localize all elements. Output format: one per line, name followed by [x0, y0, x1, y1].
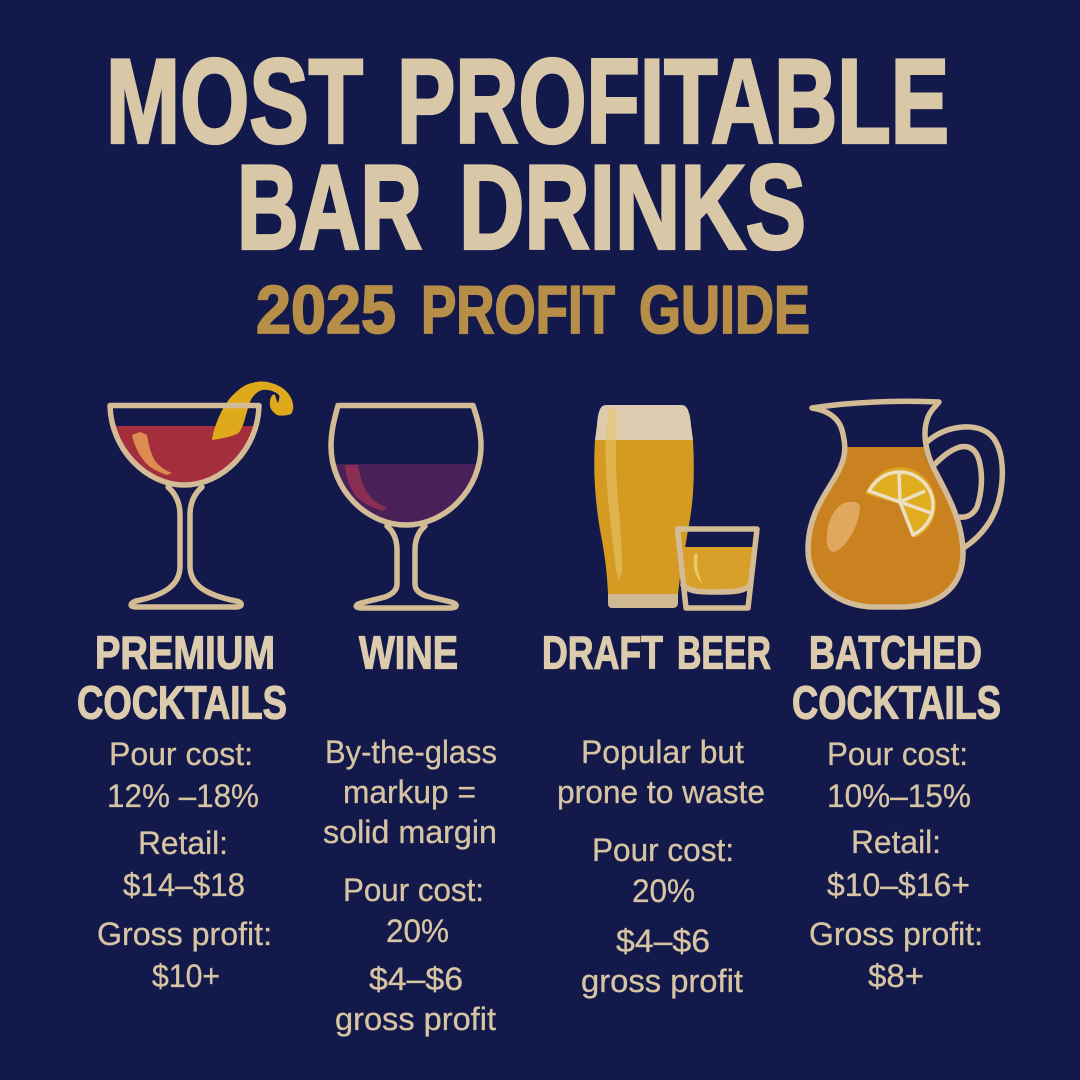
- heading: premium cocktails: PREMIUM: [95, 626, 275, 678]
- heading: draft beer: BEER: [677, 626, 771, 678]
- text: premium cocktails stats: Pour cost:: [109, 736, 253, 772]
- icon: draft beer pint and shot: [594, 405, 757, 608]
- text: wine stats: Pour cost:: [343, 872, 484, 908]
- subtitle: GUIDE: [639, 272, 810, 348]
- text: batched cocktails stats: $8+: [868, 958, 924, 994]
- text: batched cocktails stats: Retail:: [851, 824, 941, 860]
- subtitle: 2025: [256, 272, 396, 348]
- icon: wine glass: [331, 406, 481, 608]
- title: [106, 34, 949, 274]
- text: wine stats: 20%: [386, 913, 449, 949]
- text: premium cocktails stats: 12% –18%: [107, 778, 259, 814]
- heading: premium cocktails: COCKTAILS: [77, 676, 287, 728]
- heading: draft beer: [542, 626, 771, 678]
- text: batched cocktails stats: Gross profit:: [809, 916, 983, 952]
- title: DRINKS: [459, 140, 806, 274]
- subtitle: [256, 272, 810, 348]
- text: premium cocktails stats: Gross profit:: [97, 916, 272, 952]
- icon: premium cocktail coupe: [110, 382, 293, 607]
- text: wine stats: $4–$6: [369, 961, 463, 997]
- text: premium cocktails stats: [97, 736, 272, 994]
- heading: draft beer: DRAFT: [542, 626, 663, 678]
- lemon slice: [865, 467, 936, 538]
- text: draft beer stats: [557, 734, 765, 999]
- text: batched cocktails stats: [809, 736, 983, 994]
- title: BAR: [237, 140, 422, 274]
- text: premium cocktails stats: $14–$18: [123, 867, 245, 903]
- text: wine stats: gross profit: [335, 1001, 496, 1037]
- subtitle: PROFIT: [421, 272, 615, 348]
- text: draft beer stats: gross profit: [581, 963, 743, 999]
- text: batched cocktails stats: $10–$16+: [827, 867, 970, 903]
- text: premium cocktails stats: $10+: [152, 958, 220, 994]
- icon: batched cocktail pitcher: [808, 401, 1002, 607]
- text: batched cocktails stats: 10%–15%: [827, 778, 971, 814]
- panel: draft beer: [542, 626, 771, 999]
- title: MOST: [106, 34, 363, 168]
- panel: premium cocktails: [77, 626, 287, 994]
- text: premium cocktails stats: Retail:: [138, 825, 228, 861]
- text: batched cocktails stats: Pour cost:: [827, 736, 968, 772]
- text: draft beer stats: prone to waste: [557, 774, 765, 810]
- text: wine stats: [323, 734, 497, 1037]
- heading: batched cocktails: BATCHED: [809, 626, 982, 678]
- text: wine stats: markup =: [343, 774, 476, 810]
- heading: wine: WINE: [359, 626, 458, 678]
- text: draft beer stats: Pour cost:: [592, 832, 734, 868]
- text: draft beer stats: 20%: [632, 873, 695, 909]
- text: draft beer stats: Popular but: [581, 734, 744, 770]
- heading: premium cocktails: [77, 626, 287, 728]
- text: wine stats: By-the-glass: [325, 734, 497, 770]
- heading: batched cocktails: [792, 626, 1001, 728]
- panel: batched cocktails: [792, 626, 1001, 994]
- heading: batched cocktails: COCKTAILS: [792, 676, 1001, 728]
- panel: wine: [323, 626, 497, 1037]
- text: draft beer stats: $4–$6: [616, 923, 710, 959]
- text: wine stats: solid margin: [323, 814, 497, 850]
